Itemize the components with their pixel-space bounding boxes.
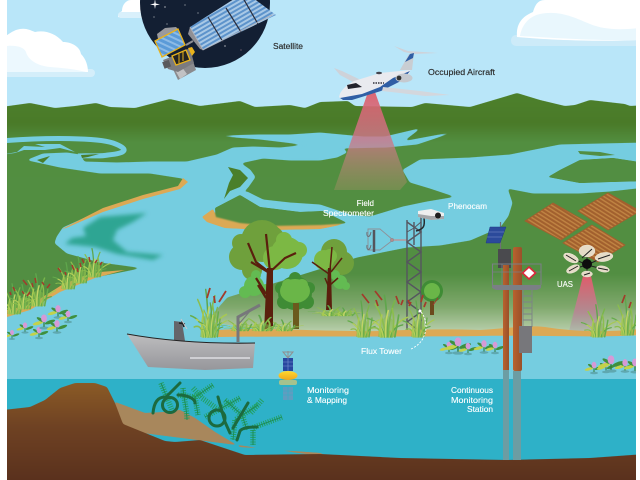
field spectrometer bbox=[367, 229, 407, 252]
dark river islets bbox=[37, 154, 248, 199]
floating plants: right bbox=[584, 355, 640, 374]
creek: far left branch bbox=[7, 144, 75, 154]
reeds: right shore bbox=[582, 295, 640, 337]
sky bbox=[7, 0, 636, 108]
algal bloom bbox=[65, 213, 163, 260]
continuous monitoring station bbox=[492, 247, 541, 460]
inner land tongue bbox=[578, 151, 615, 156]
left sand spit bbox=[62, 178, 188, 229]
flux tower pointer bbox=[411, 310, 426, 349]
reeds: left bank bbox=[0, 248, 110, 314]
monitoring buoy bbox=[278, 351, 298, 400]
satellite background disc bbox=[140, 0, 270, 68]
lake bed sand bbox=[115, 402, 330, 457]
label: UAS: UAS bbox=[557, 280, 573, 289]
cloud: left bbox=[0, 29, 95, 77]
tree: large bbox=[229, 220, 307, 331]
boat bbox=[127, 305, 260, 370]
mountains and land bbox=[0, 93, 640, 345]
cloud: right bbox=[511, 0, 640, 46]
solar panel bbox=[486, 222, 506, 250]
flux tower bbox=[407, 217, 421, 332]
land strip on right bbox=[548, 158, 640, 183]
label: Field: Field bbox=[357, 199, 374, 208]
label: Phenocam: Phenocam bbox=[448, 202, 487, 211]
seaweed bbox=[153, 383, 282, 445]
grass at tree bases bbox=[220, 305, 364, 331]
creek: upper left meander bbox=[0, 139, 124, 156]
label: Monitoring & Mapping: Monitoring bbox=[307, 386, 349, 395]
label: Continuous Monitoring Station: Continuous bbox=[451, 386, 493, 395]
label: Station: Station bbox=[467, 405, 493, 414]
phenocam bbox=[416, 209, 444, 231]
occupied aircraft bbox=[334, 46, 450, 100]
label: Satellite: Satellite bbox=[273, 42, 304, 51]
lake bed ground bbox=[0, 383, 640, 480]
shoreline sand bbox=[218, 326, 640, 337]
label: & Mapping: & Mapping bbox=[307, 396, 347, 405]
crop fields bbox=[525, 193, 640, 262]
label: Occupied Aircraft: Occupied Aircraft bbox=[428, 68, 496, 77]
label: Spectrometer: Spectrometer bbox=[323, 209, 374, 218]
reeds: centre shore bbox=[348, 291, 434, 337]
reeds: beside boat bbox=[191, 288, 226, 337]
floating plants: centre bbox=[439, 337, 505, 355]
tree: round middle bbox=[275, 272, 315, 329]
tree: right of large tree bbox=[312, 239, 354, 310]
water: river, lake and shallows bbox=[0, 129, 640, 380]
deep water bbox=[7, 379, 636, 464]
tree: small beside tower bbox=[421, 280, 443, 315]
label: Flux Tower: Flux Tower bbox=[361, 347, 402, 356]
UAS drone bbox=[562, 245, 614, 277]
satellite bbox=[155, 0, 276, 80]
left shore sand bbox=[7, 270, 125, 317]
island with sand bbox=[202, 195, 347, 230]
floating plants: left bbox=[4, 305, 78, 340]
cloud: small behind satellite bbox=[118, 0, 142, 18]
label: Monitoring: Monitoring bbox=[451, 396, 493, 405]
left bank bbox=[7, 280, 62, 310]
aircraft sensor beam bbox=[334, 92, 407, 190]
UAS sensor beam bbox=[570, 276, 602, 331]
